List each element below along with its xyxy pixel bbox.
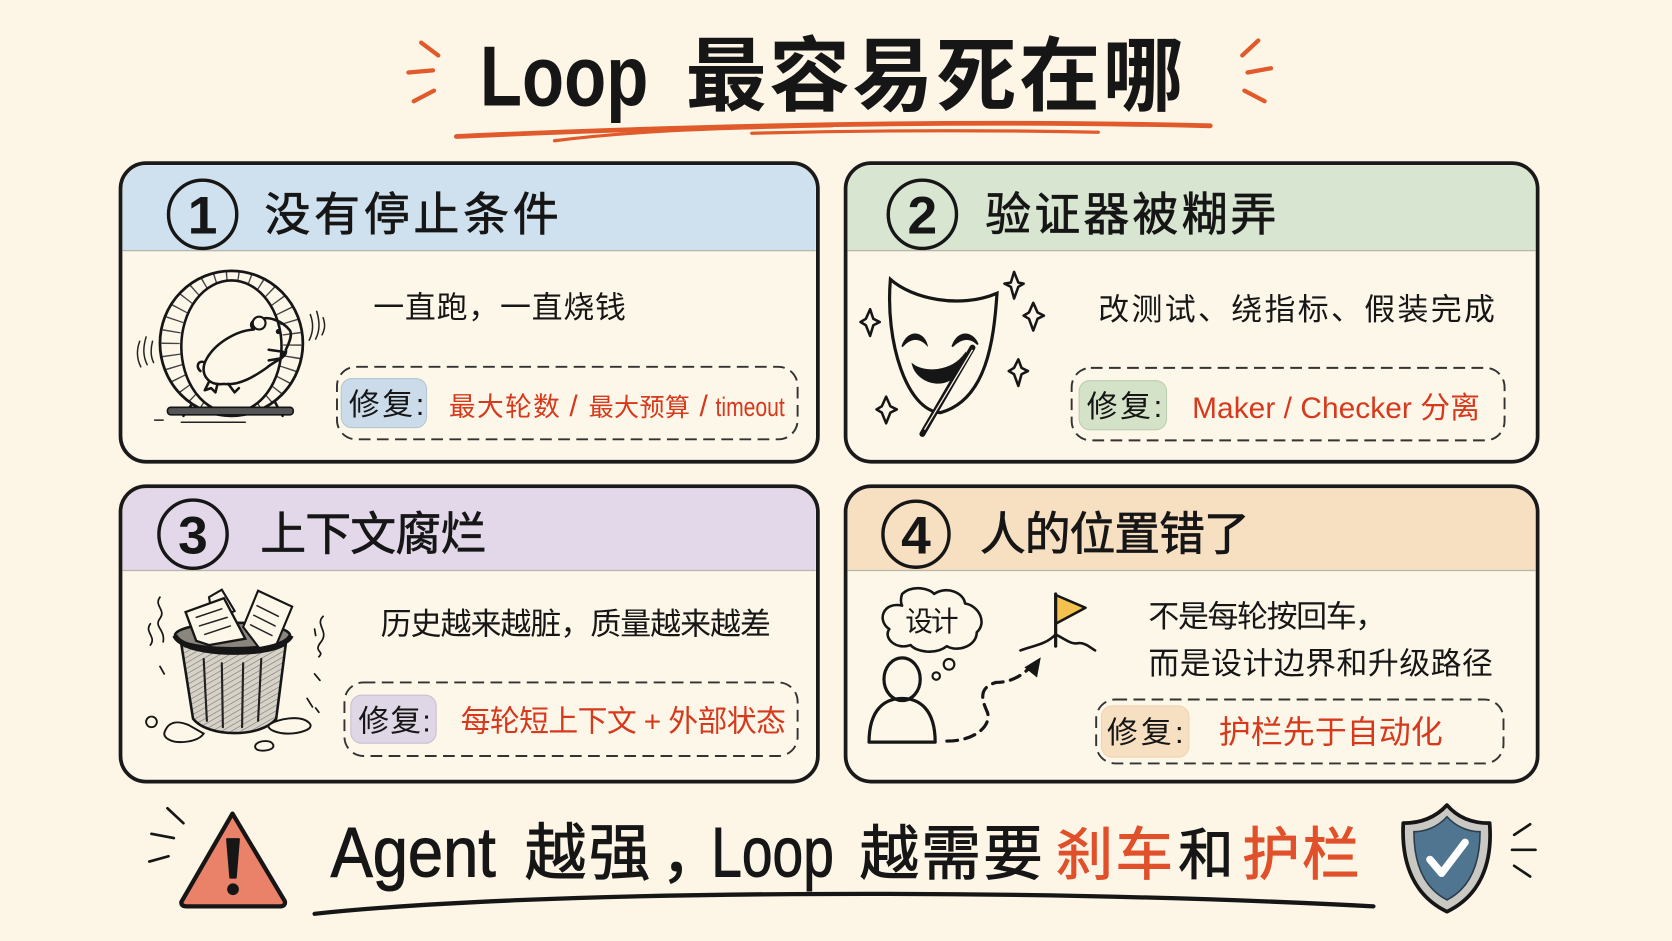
fix label: 修复:	[1107, 715, 1184, 750]
fix box	[344, 682, 798, 756]
icon: person thinking with path to flag	[869, 588, 1095, 742]
fix text	[449, 390, 785, 423]
number badge 2	[888, 180, 956, 248]
panel: context rot	[121, 486, 818, 782]
fix text: 护栏先于自动化	[1219, 714, 1443, 750]
panel: validator gamed	[846, 163, 1538, 462]
title underline	[456, 123, 1210, 141]
number badge 1	[169, 180, 237, 248]
number badge 4	[883, 501, 949, 567]
body text: 而是设计边界和升级路径	[1148, 646, 1493, 681]
panel header: orange	[848, 488, 1535, 570]
fix label	[1102, 706, 1189, 757]
bottom takeaway: 刹车	[1056, 823, 1173, 887]
number badge 3	[159, 500, 227, 568]
body text: 历史越来越脏，质量越来越差	[381, 606, 771, 641]
takeaway underline	[315, 894, 1373, 914]
fix label: 修复:	[358, 703, 431, 738]
heading: 上下文腐烂	[260, 508, 486, 560]
shield rays	[1512, 824, 1535, 876]
bottom takeaway: 和	[1178, 824, 1234, 886]
heading: 验证器被糊弄	[985, 188, 1276, 240]
title burst left	[408, 43, 438, 101]
bottom takeaway: 护栏	[1242, 823, 1360, 887]
panel: no stop condition	[121, 163, 818, 462]
icon: warning triangle	[181, 814, 285, 906]
icon: smiling mask	[861, 272, 1044, 434]
fix text: timeout	[716, 392, 785, 422]
warning rays	[149, 808, 183, 862]
panel: human in the wrong place	[846, 486, 1538, 782]
fix label	[1079, 381, 1167, 430]
fix label	[351, 695, 436, 743]
number badge 4: 4	[901, 506, 931, 565]
fix text: 最大预算	[589, 394, 690, 422]
panel header: green	[848, 165, 1535, 251]
heading: 没有停止条件	[264, 188, 559, 240]
body text: 改测试、绕指标、假装完成	[1098, 292, 1495, 327]
thought cloud	[883, 588, 982, 652]
heading: 人的位置错了	[980, 508, 1250, 560]
body text	[1148, 599, 1493, 681]
title: Loop	[480, 30, 648, 125]
fix text: Maker / Checker 分离	[1192, 392, 1480, 425]
bottom takeaway: 越需要	[859, 820, 1043, 887]
body text: 一直跑，一直烧钱	[373, 290, 626, 325]
bottom takeaway: 越强	[525, 819, 650, 888]
number badge 3: 3	[178, 506, 208, 565]
title burst right	[1242, 41, 1271, 101]
bottom takeaway: Loop	[711, 812, 834, 891]
fix box	[1096, 699, 1503, 763]
bottom takeaway: ，	[661, 821, 723, 890]
title	[480, 30, 1184, 125]
panel header: blue	[123, 165, 816, 251]
thought cloud: 设计	[905, 606, 959, 637]
fix box	[1072, 368, 1505, 440]
icon: shield with check	[1403, 805, 1490, 912]
fix text: 最大轮数	[449, 392, 560, 422]
panel header: purple	[123, 488, 816, 570]
fix label: 修复:	[1087, 389, 1162, 424]
fix text: 每轮短上下文 + 外部状态	[461, 705, 786, 738]
fix label: 修复:	[349, 387, 424, 422]
fix box	[337, 367, 798, 439]
number badge 1: 1	[188, 187, 217, 246]
number badge 2: 2	[908, 187, 937, 246]
icon: hamster wheel	[137, 271, 325, 422]
title: 最容易死在哪	[686, 32, 1184, 122]
fix text: /	[569, 390, 578, 423]
icon: overflowing trash can	[146, 590, 324, 751]
bottom takeaway	[331, 812, 1360, 891]
fix label	[341, 379, 427, 428]
body text: 不是每轮按回车，	[1148, 599, 1386, 634]
fix text: /	[700, 390, 709, 423]
bottom takeaway: Agent	[331, 812, 496, 891]
